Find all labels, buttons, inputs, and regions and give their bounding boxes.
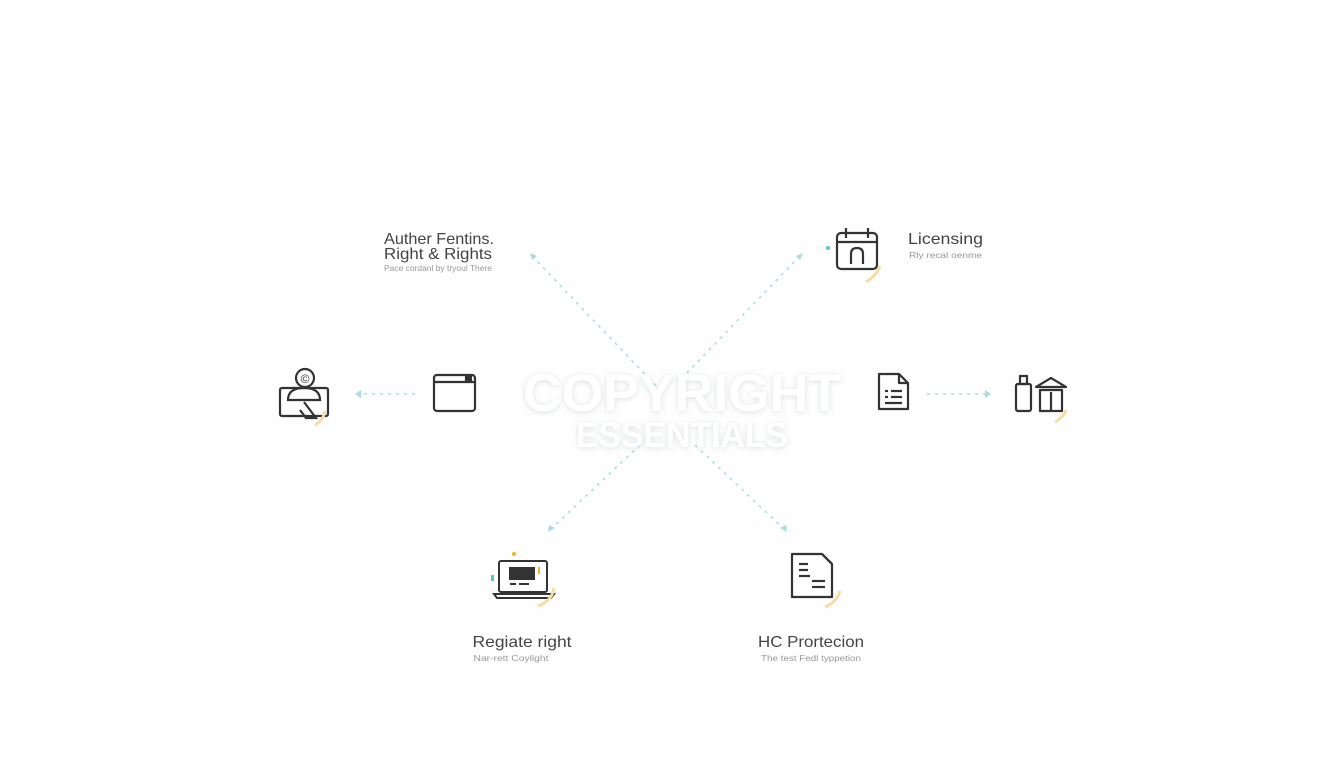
icon: document list [879, 374, 908, 409]
icon: browser window [434, 375, 475, 411]
text: regiate right: Regiate right [472, 634, 572, 651]
icon: licensing calendar [826, 228, 880, 282]
icon: bottle and bank [1016, 376, 1066, 422]
title: ESSENTIALS [576, 416, 788, 455]
title: COPYRIGHT [523, 364, 841, 423]
icon: author with copyright [280, 369, 328, 425]
text: licensing [908, 231, 983, 260]
node: author rights text [384, 231, 494, 273]
arrowheads [355, 253, 991, 532]
text: regiate right: Nar-rett Coylight [474, 654, 549, 663]
text: licensing: Licensing [908, 231, 983, 248]
connector lines [360, 256, 985, 530]
text: HC protection: HC Prortecion [758, 634, 864, 651]
node: author rights text: Auther Fentins. [384, 231, 494, 248]
text: regiate right [472, 634, 572, 663]
node: author rights text: Right & Rights [384, 246, 492, 263]
text: HC protection: The test Fedl typpetion [761, 654, 861, 663]
node: author rights text: Pace cordanl by tryoul There [384, 264, 493, 273]
icon: author with copyright: © [301, 372, 310, 386]
text: licensing: Rly recal oenme [909, 251, 983, 260]
icon: laptop [491, 552, 554, 606]
icon: document [792, 554, 840, 607]
title [523, 364, 841, 455]
text: HC protection [758, 634, 864, 663]
